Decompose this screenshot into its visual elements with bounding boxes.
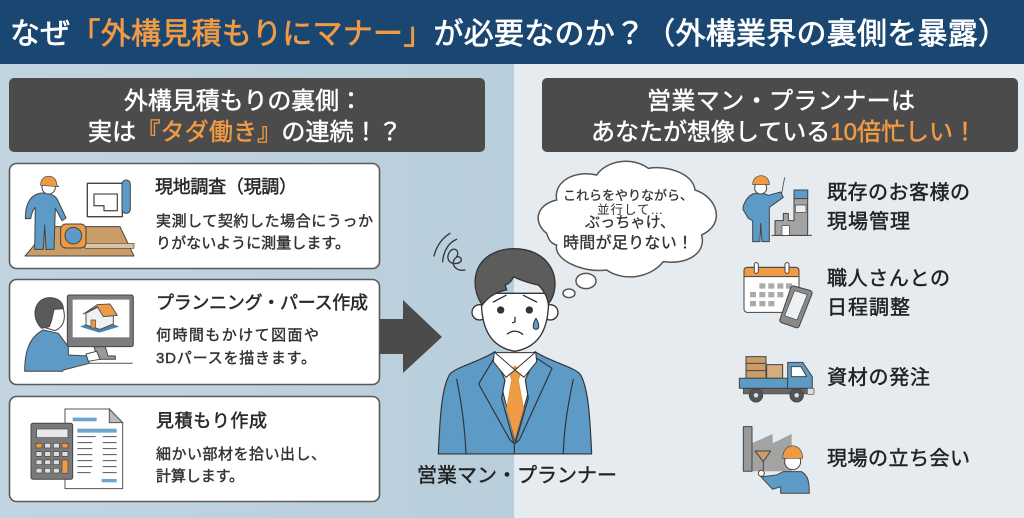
card text: 何時間もかけて図面や — [156, 327, 319, 344]
card text: 見積もり作成 — [156, 411, 267, 431]
task: schedule coordination: 日程調整 — [827, 296, 910, 319]
card text — [156, 411, 326, 485]
thought bubble: これらをやりながら、 — [563, 188, 693, 203]
thought bubble: 時間が足りない！ — [563, 234, 693, 252]
panel heading: right — [542, 78, 1018, 152]
card text: 現地調査（現調） — [155, 177, 297, 197]
task: material ordering — [739, 357, 930, 402]
suit — [438, 352, 592, 454]
thought bubble: 並行して… — [597, 203, 663, 217]
card text: 実測して契約した場合にうっか — [156, 213, 373, 230]
icon: swirl — [434, 233, 465, 270]
icon: supervisor and building — [743, 176, 812, 242]
task: site attendance: 現場の立ち会い — [827, 447, 970, 470]
thought bubble — [538, 161, 716, 298]
icon: delivery truck — [739, 357, 814, 402]
arrow — [380, 300, 442, 373]
task: schedule coordination: 職人さんとの — [827, 267, 950, 290]
panel: site survey card — [10, 164, 380, 268]
task: site management: 現場管理 — [827, 210, 910, 233]
card text: 計算します。 — [156, 467, 244, 485]
panel heading: left: 実は『タダ働き』の連続！？ — [88, 119, 402, 146]
title banner — [0, 0, 1024, 64]
card text: 細かい部材を拾い出し、 — [156, 446, 326, 463]
icon: designer at monitor — [25, 295, 133, 371]
panel heading: right: 営業マン・プランナーは — [647, 88, 915, 115]
title banner: なぜ「外構見積もりにマナー」が必要なのか？（外構業界の裏側を暴露） — [10, 18, 1008, 51]
panel heading: right: あなたが想像している10倍忙しい！ — [591, 119, 977, 146]
panel heading: left: 外構見積もりの裏側： — [124, 88, 363, 115]
task: site attendance — [743, 427, 970, 493]
character: worried salesperson — [434, 233, 592, 454]
icon: worker at factory — [743, 427, 809, 493]
card text: りがないように測量します。 — [156, 235, 350, 252]
panel: estimate card — [10, 396, 380, 502]
task: material ordering: 資材の発注 — [827, 366, 930, 389]
card text: プランニング・パース作成 — [156, 293, 368, 313]
card text — [156, 293, 368, 367]
icon: surveyor with tape measure — [25, 176, 134, 256]
character label: 営業マン・プランナー — [417, 464, 617, 487]
card text — [155, 177, 373, 252]
task: schedule coordination — [744, 263, 950, 328]
card text: 3Dパースを描きます。 — [156, 350, 316, 367]
task: site management: 既存のお客様の — [827, 181, 970, 204]
panel: planning card — [10, 280, 380, 384]
head — [472, 305, 487, 320]
icon: calendar and phone — [744, 263, 812, 328]
panel heading: left — [9, 78, 485, 152]
task: site management — [743, 176, 970, 242]
thought bubble: ぶっちゃけ、 — [585, 214, 675, 231]
icon: calculator and estimate sheet — [31, 409, 123, 489]
